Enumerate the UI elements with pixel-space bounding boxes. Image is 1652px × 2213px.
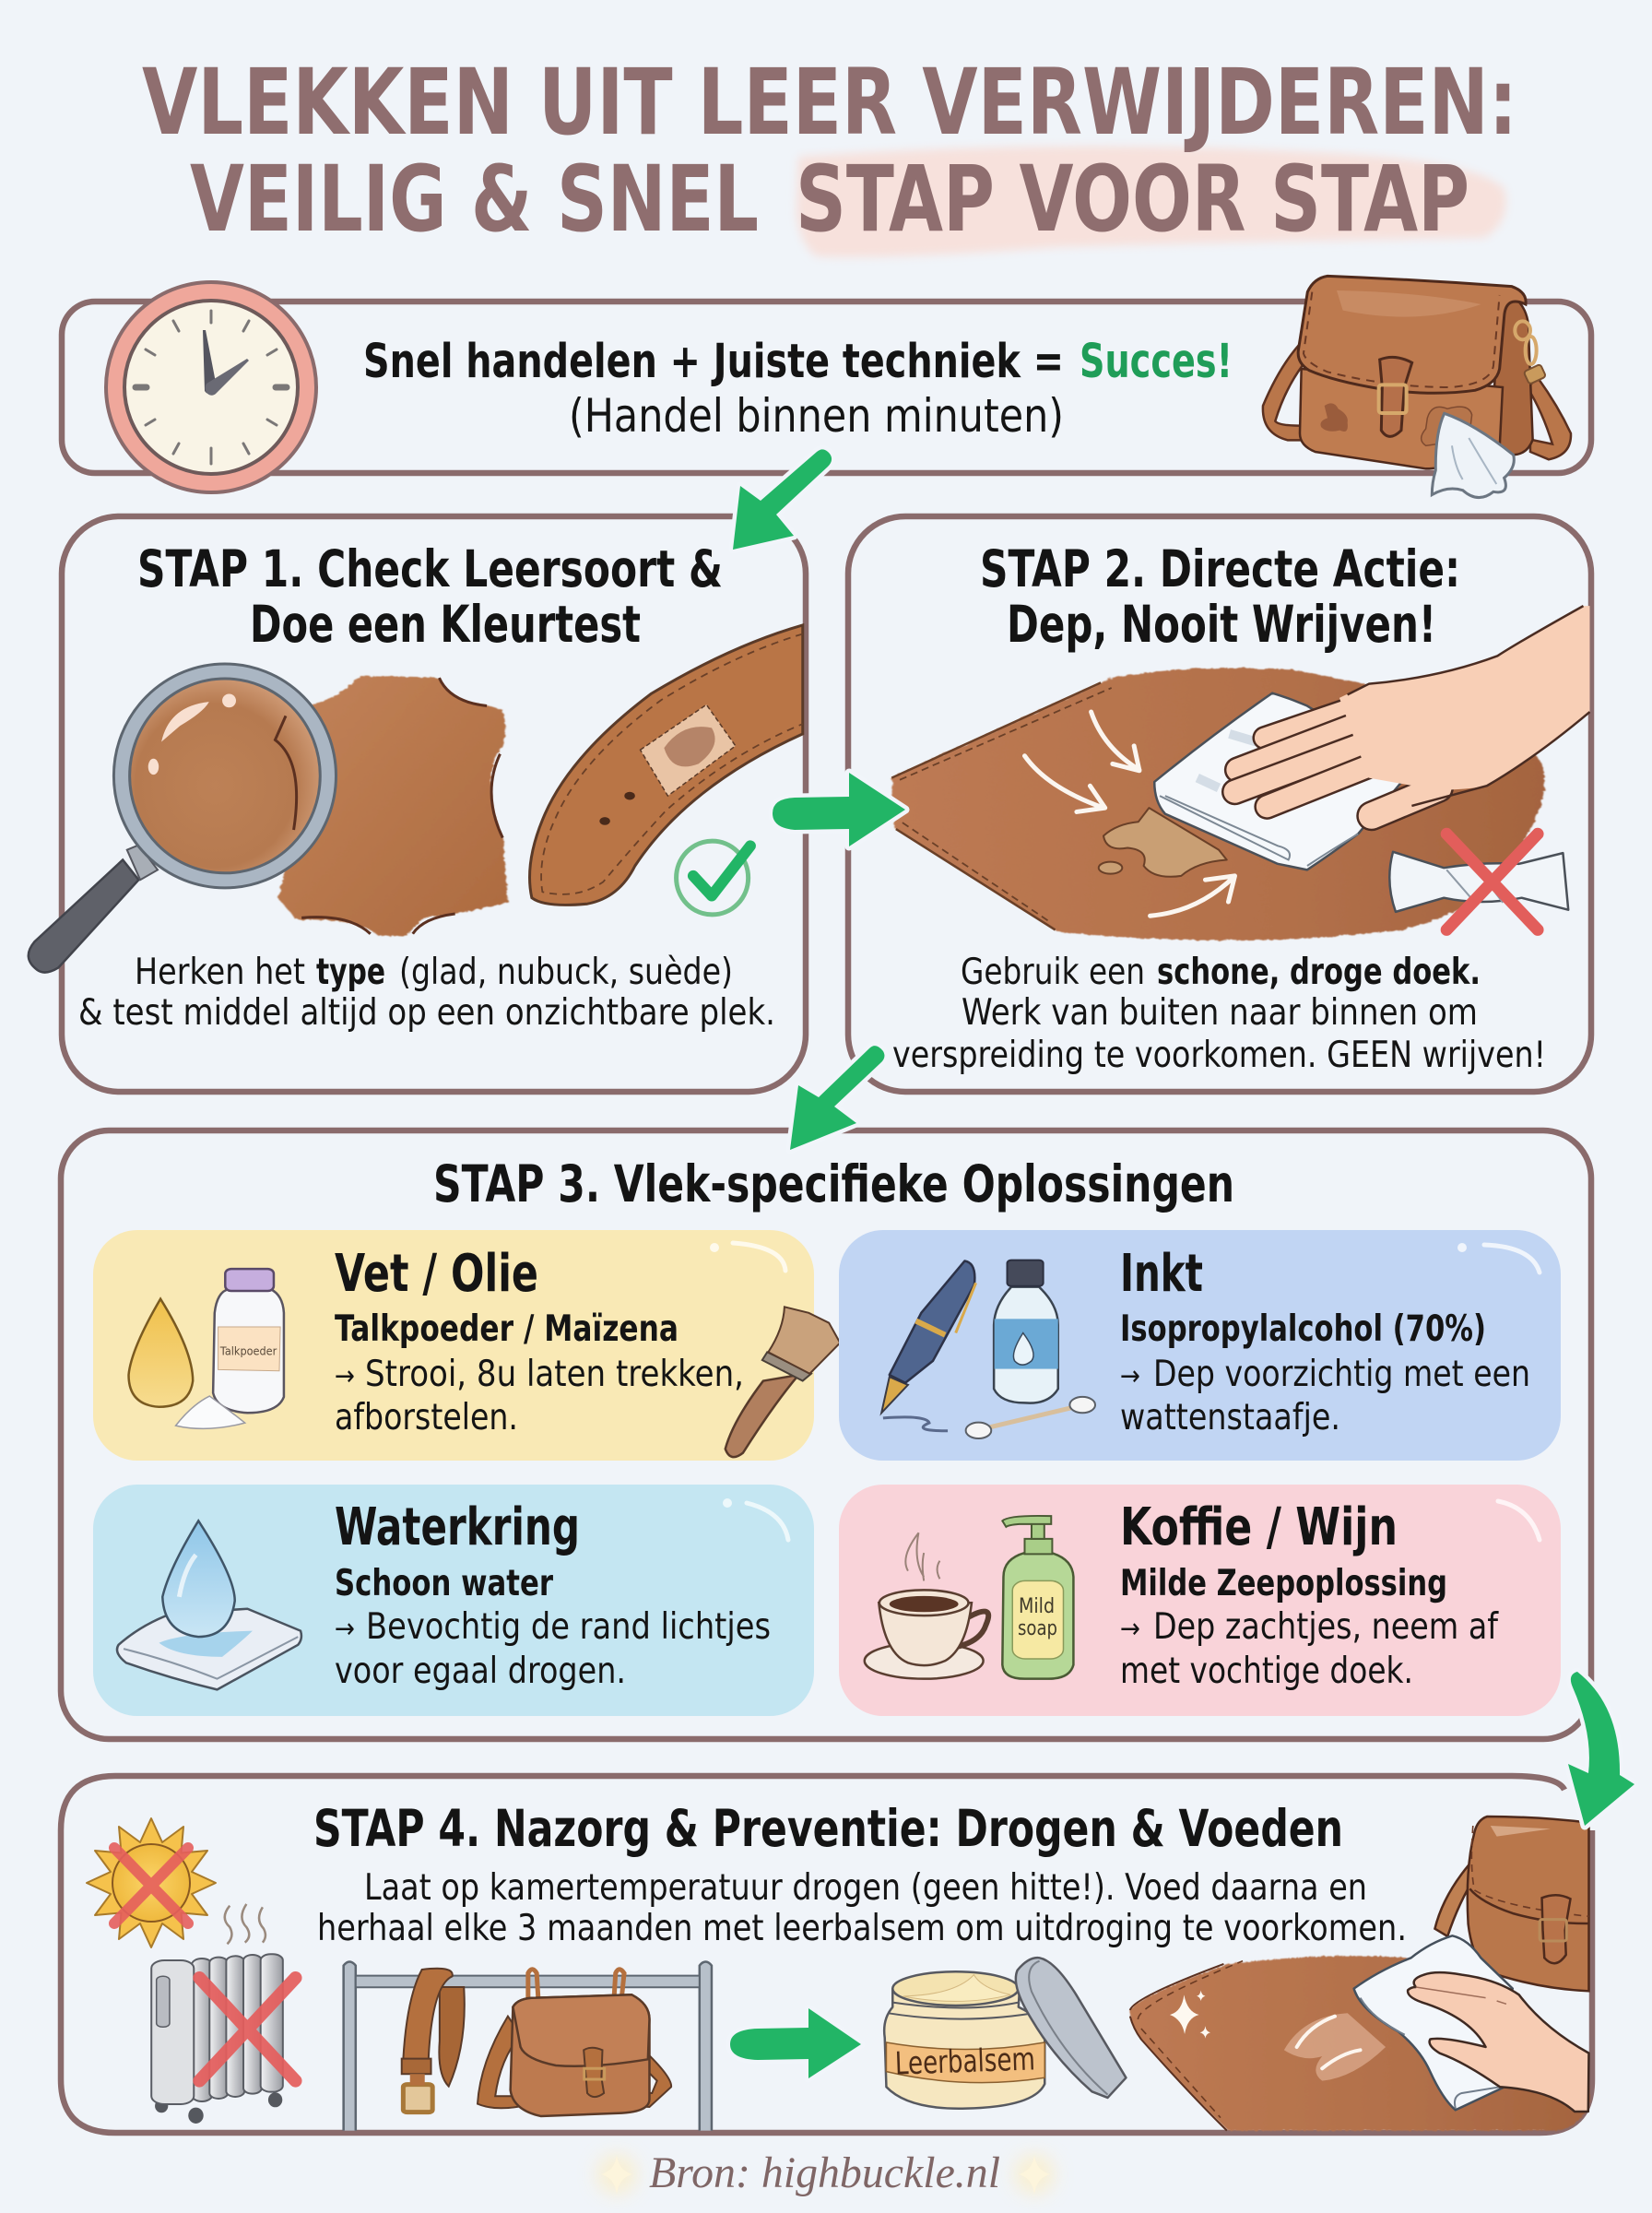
- title: STAP VOOR STAP: [796, 147, 1469, 253]
- illustration: bag behind cloth: [1434, 1817, 1588, 1991]
- panel: step 1: [29, 516, 806, 1092]
- icons: pen, alcohol bottle, cotton swab: [881, 1260, 1095, 1438]
- icons: oil drop, powder, brush: Talkpoeder: [219, 1344, 277, 1358]
- arrow: banner to step 1: [733, 449, 832, 550]
- arrow: step 2 to step 3: [790, 1046, 884, 1150]
- card text: vet / olie: Talkpoeder / Maïzena: [335, 1308, 678, 1350]
- step 2 body text: Gebruik een: [961, 952, 1145, 993]
- icons: coffee cup, soap bottle: [865, 1516, 1073, 1679]
- icon: twisted cloth crossed out: [1389, 834, 1568, 929]
- icon: clock: [106, 282, 316, 492]
- step 1 body text: type: [316, 952, 385, 993]
- panel: step 2: [848, 516, 1591, 1092]
- banner text: Snel handelen + Juiste techniek =: [363, 335, 1064, 389]
- step 4 body text: herhaal elke 3 maanden met leerbalsem om uitdroging te voorkomen.: [317, 1908, 1407, 1949]
- banner text: Succes!: [1080, 335, 1233, 389]
- soap label: soap: [1018, 1617, 1057, 1640]
- soap label: Mild: [1019, 1595, 1055, 1618]
- illustration: leather with stain: [891, 669, 1545, 941]
- banner text: [363, 335, 1233, 443]
- jar label: Leerbalsem: [894, 2041, 1036, 2083]
- step 1 heading: Doe een Kleurtest: [250, 595, 641, 654]
- icons: oil drop, powder, brush: [129, 1269, 840, 1457]
- arrow: step 3 to step 4: [1568, 1672, 1634, 1826]
- illustration: polished leather with sparkle: [1130, 1956, 1590, 2131]
- illustration: drying rack with belt and bag: [344, 1961, 712, 2131]
- sparkles: [1170, 1990, 1210, 2039]
- step 4 body text: Laat op kamertemperatuur drogen (geen hitte!). Voed daarna en: [364, 1867, 1367, 1909]
- card: koffie / wijn: [839, 1485, 1561, 1716]
- card text: koffie / wijn: Milde Zeepoplossing: [1120, 1563, 1447, 1604]
- step 1 heading: STAP 1. Check Leersoort &: [137, 539, 723, 598]
- fingers: [1234, 706, 1438, 816]
- step 2 body text: [892, 952, 1546, 1076]
- panel: step 4: [61, 1776, 1592, 2133]
- arrow: step 1 to step 2: [773, 773, 905, 846]
- title: VEILIG & SNEL: [190, 147, 759, 253]
- white inward arrows: [1024, 712, 1234, 916]
- stain: [1103, 808, 1227, 877]
- card text: inkt: →: [1120, 1360, 1140, 1392]
- soap label: [1018, 1595, 1057, 1640]
- card text: inkt: Isopropylalcohol (70%): [1120, 1308, 1486, 1350]
- tissue: [1432, 413, 1514, 498]
- title: [142, 50, 1517, 257]
- step 1 body text: (glad, nubuck, suède): [399, 952, 733, 993]
- card text: koffie / wijn: [1120, 1497, 1499, 1692]
- illustration: folded cloth and hand: [1154, 606, 1589, 870]
- arrow: green to balm: [730, 2008, 861, 2078]
- icon: green check: [677, 841, 750, 915]
- step 2 heading: STAP 2. Directe Actie:: [980, 539, 1460, 598]
- card text: waterkring: voor egaal drogen.: [335, 1651, 626, 1692]
- card text: waterkring: Waterkring: [335, 1497, 580, 1557]
- icon: sun crossed out: [87, 1818, 216, 1947]
- card text: inkt: Dep voorzichtig met een: [1153, 1354, 1530, 1395]
- icon: magnifying glass: [29, 664, 336, 973]
- card: waterkring: [93, 1485, 814, 1716]
- step 4 body text: [317, 1867, 1407, 1949]
- step 1 body text: [78, 952, 775, 1034]
- step 2 heading: [980, 539, 1460, 654]
- step 2 body text: schone, droge doek.: [1157, 952, 1481, 993]
- card: inkt: [839, 1230, 1561, 1461]
- step 3 heading: STAP 3. Vlek-specifieke Oplossingen: [433, 1154, 1234, 1213]
- title highlight: [796, 147, 1506, 257]
- illustration: cloth and hand polishing: [1354, 1935, 1588, 2112]
- card text: vet / olie: →: [335, 1360, 355, 1392]
- icon: radiator crossed out: [151, 1904, 296, 2124]
- step 4 heading: STAP 4. Nazorg & Preventie: Drogen & Voeden: [313, 1799, 1343, 1858]
- icon: stained leather bag with tissue: [1263, 276, 1571, 498]
- card: vet / olie: [93, 1230, 840, 1461]
- illustration: leather hide: [277, 676, 508, 936]
- card text: vet / olie: afborstelen.: [335, 1397, 518, 1438]
- card text: inkt: [1120, 1244, 1530, 1438]
- icon: leerbalsem jar: [884, 1958, 1126, 2109]
- card text: vet / olie: Strooi, 8u laten trekken,: [365, 1354, 744, 1395]
- panel: step 3: [61, 1130, 1591, 1739]
- banner text: (Handel binnen minuten): [569, 389, 1064, 443]
- card text: inkt: wattenstaafje.: [1120, 1397, 1340, 1438]
- card text: waterkring: Schoon water: [335, 1563, 554, 1604]
- source line: Bron: highbuckle.nl: [649, 2148, 1000, 2197]
- card text: koffie / wijn: →: [1120, 1613, 1140, 1645]
- step 2 body text: verspreiding te voorkomen. GEEN wrijven!: [892, 1035, 1546, 1076]
- card text: koffie / wijn: met vochtige doek.: [1120, 1651, 1413, 1692]
- step 2 body text: Werk van buiten naar binnen om: [962, 992, 1478, 1034]
- card text: vet / olie: [335, 1244, 744, 1438]
- sparkle right: [1014, 2154, 1055, 2195]
- card text: waterkring: →: [335, 1613, 355, 1645]
- sparkle left: [596, 2154, 637, 2195]
- card text: waterkring: [335, 1497, 771, 1692]
- step 1 heading: [137, 539, 723, 654]
- step 1 body text: Herken het: [135, 952, 305, 993]
- card text: waterkring: Bevochtig de rand lichtjes: [366, 1606, 771, 1648]
- illustration: belt with test patch: [530, 625, 803, 905]
- card text: vet / olie: Vet / Olie: [335, 1244, 538, 1304]
- card text: koffie / wijn: Dep zachtjes, neem af: [1153, 1606, 1499, 1648]
- panel: intro banner: [62, 302, 1591, 473]
- step 2 heading: Dep, Nooit Wrijven!: [1007, 595, 1436, 654]
- icons: water drop on cloth: [117, 1521, 301, 1689]
- card text: inkt: Inkt: [1120, 1244, 1203, 1304]
- step 1 body text: & test middel altijd op een onzichtbare plek.: [78, 992, 775, 1034]
- card text: koffie / wijn: Koffie / Wijn: [1120, 1497, 1398, 1557]
